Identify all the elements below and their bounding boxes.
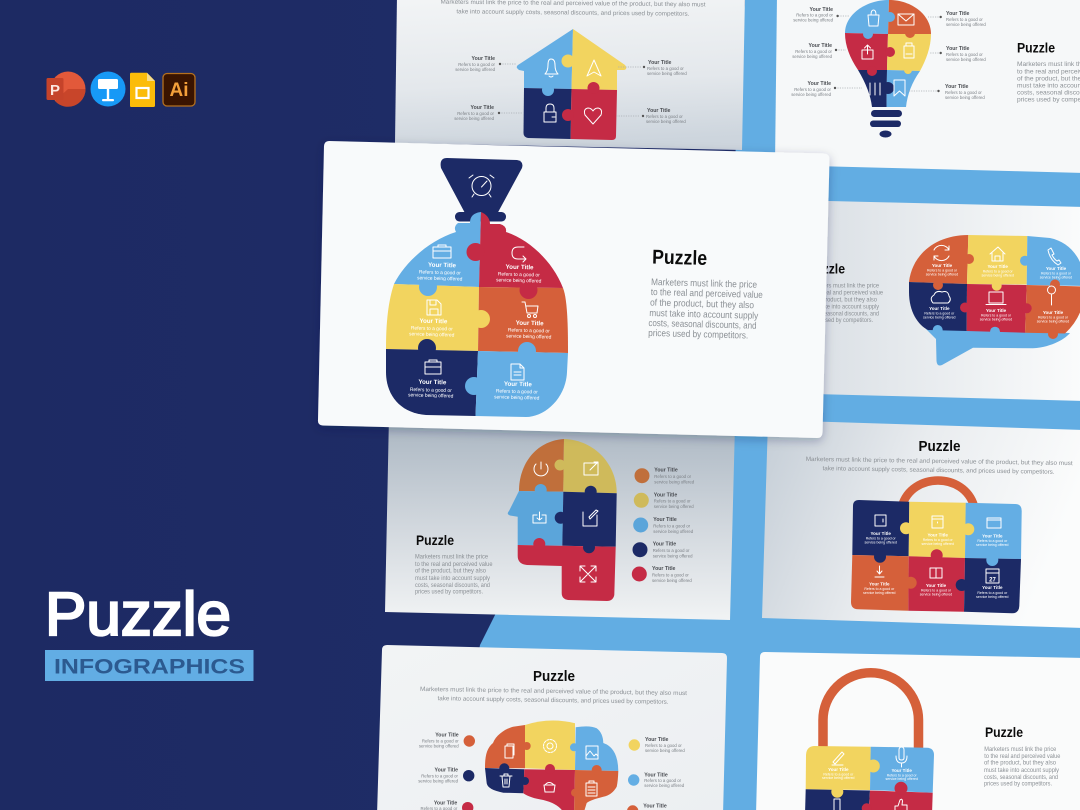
piece captions: Refers to a good or xyxy=(923,538,954,542)
bulb labels: service being offered xyxy=(946,57,986,62)
piece captions: service being offered xyxy=(926,272,958,276)
description text xyxy=(648,277,763,342)
piece captions: Refers to a good or xyxy=(921,589,952,593)
piece captions: service being offered xyxy=(885,777,918,781)
piece captions: Your Title xyxy=(505,264,534,271)
bulb labels: Your Title xyxy=(809,43,832,49)
speech bubble puzzle diagram xyxy=(909,235,1080,366)
brain labels: Your Title xyxy=(644,773,668,779)
piece captions: Your Title xyxy=(892,768,912,773)
legend: Refers to a good or xyxy=(654,474,692,479)
piece captions: service being offered xyxy=(494,394,540,402)
panel: main money bag slide xyxy=(318,141,830,438)
piece captions xyxy=(923,263,1072,324)
piece captions: Refers to a good or xyxy=(887,773,918,777)
description text: of the product, but they also xyxy=(415,568,486,574)
bulb labels: Your Title xyxy=(946,46,970,52)
legend: Refers to a good or xyxy=(652,572,689,577)
icon: trash xyxy=(500,774,512,787)
icon: share box xyxy=(584,462,598,475)
piece captions: Refers to a good or xyxy=(1038,316,1069,320)
legend: Refers to a good or xyxy=(653,548,690,553)
description text: must take into account supply xyxy=(415,575,491,582)
description text: Marketers must link the price xyxy=(984,746,1057,753)
briefcase puzzle diagram xyxy=(851,480,1022,613)
icon: gear xyxy=(544,740,556,752)
heading: Puzzle xyxy=(416,532,454,548)
panel: briefcase slide xyxy=(762,420,1080,628)
panel: speech bubble slide xyxy=(700,198,1080,401)
icon: document xyxy=(511,364,524,380)
piece captions: Your Title xyxy=(869,581,890,586)
piece captions: service being offered xyxy=(976,543,1009,547)
icon: laptop xyxy=(986,292,1006,304)
icon: image xyxy=(586,746,598,759)
icon: expand arrows xyxy=(580,566,596,582)
piece captions: service being offered xyxy=(496,277,542,285)
icon: open book xyxy=(930,568,942,578)
icon: thumbs up xyxy=(895,799,907,810)
house labels: Refers to a good or xyxy=(457,111,495,116)
legend: Refers to a good or xyxy=(653,523,691,528)
piece captions: Your Title xyxy=(428,262,457,269)
piece captions: Refers to a good or xyxy=(983,270,1014,274)
brain labels: Your Title xyxy=(645,737,669,743)
icon: phone xyxy=(1048,248,1061,265)
bulb puzzle diagram xyxy=(845,0,931,138)
description text: Marketers must link the price to the real and perceived value of the product, but they also must xyxy=(420,686,687,697)
legend: Your Title xyxy=(653,542,676,548)
icon: heart xyxy=(584,108,602,124)
description text: must take into account supply xyxy=(649,308,759,322)
piece captions: Refers to a good or xyxy=(977,591,1008,595)
icon: padlock xyxy=(544,104,556,122)
icon: envelope xyxy=(898,14,914,25)
head puzzle diagram xyxy=(508,439,617,601)
icon: edit xyxy=(583,510,598,526)
icon: documents xyxy=(505,744,514,758)
bag funnel neck xyxy=(441,158,522,216)
icon: Keynote xyxy=(90,72,126,106)
description text: Marketers must link the price xyxy=(415,554,488,560)
icon: PowerPoint xyxy=(46,72,86,107)
description text xyxy=(415,554,493,596)
bulb labels: Refers to a good or xyxy=(945,90,982,95)
icon: sliders xyxy=(870,83,880,95)
house labels xyxy=(454,56,687,124)
piece captions: service being offered xyxy=(409,331,455,339)
piece captions: Refers to a good or xyxy=(498,271,540,279)
piece captions xyxy=(822,767,918,781)
legend: service being offered xyxy=(652,578,692,583)
piece captions: Your Title xyxy=(1046,266,1067,271)
padlock puzzle diagram xyxy=(805,673,1061,810)
piece captions xyxy=(863,531,1009,599)
house labels: service being offered xyxy=(647,71,687,76)
house labels: Your Title xyxy=(471,105,494,111)
brain labels: service being offered xyxy=(644,783,685,788)
house labels: service being offered xyxy=(454,116,495,121)
heading: Puzzle xyxy=(985,724,1023,740)
description text: costs, seasonal discounts, and xyxy=(984,774,1058,781)
brain labels: Your Title xyxy=(435,733,459,739)
piece captions: service being offered xyxy=(923,316,956,320)
house labels: Your Title xyxy=(648,60,672,66)
brain labels: Your Title xyxy=(434,800,457,806)
brain labels: service being offered xyxy=(418,779,459,784)
legend: Your Title xyxy=(652,566,676,572)
piece captions: Your Title xyxy=(926,583,947,588)
heading: Puzzle xyxy=(918,439,960,455)
legend: Your Title xyxy=(653,517,677,523)
heading: Puzzle xyxy=(652,247,707,270)
brain labels: service being offered xyxy=(419,744,459,749)
icon: calendar xyxy=(986,569,999,583)
description text: Marketers must link the price to the real and perceived value of the product, but they also must xyxy=(806,456,1073,467)
description text xyxy=(1017,61,1080,104)
icon: bag xyxy=(868,10,879,26)
description text: prices used by competitors. xyxy=(415,588,483,596)
house labels: Refers to a good or xyxy=(458,62,496,67)
bulb labels: Refers to a good or xyxy=(794,87,832,92)
piece captions: service being offered xyxy=(981,274,1014,278)
icon: cloud xyxy=(931,291,950,303)
heading: Puzzle xyxy=(1017,40,1055,56)
bag pieces xyxy=(386,212,568,417)
piece captions: service being offered xyxy=(822,776,855,780)
icon: shopping cart xyxy=(522,302,538,318)
panel: house slide xyxy=(395,0,745,150)
brain labels: Your Title xyxy=(435,768,458,774)
piece captions: Refers to a good or xyxy=(977,539,1008,543)
brain puzzle diagram xyxy=(485,721,618,810)
icon: toolbox xyxy=(425,360,441,374)
piece captions: Refers to a good or xyxy=(927,268,958,272)
description text: take into account supply costs, seasonal discounts, and prices used by competitors. xyxy=(456,8,690,18)
brain labels: service being offered xyxy=(645,748,685,753)
software icons row xyxy=(46,72,195,107)
icon: box xyxy=(932,516,943,528)
piece captions: service being offered xyxy=(408,392,454,400)
bulb labels: Your Title xyxy=(945,84,969,90)
description text: must take into account supply xyxy=(806,304,880,310)
icon: alarm clock xyxy=(469,175,494,197)
panel: light bulb slide xyxy=(775,0,1080,173)
piece captions: Your Title xyxy=(932,263,953,268)
piece captions: Your Title xyxy=(986,308,1007,313)
description text xyxy=(440,0,706,18)
piece captions: Refers to a good or xyxy=(411,325,453,333)
brain labels: Refers to a good or xyxy=(422,738,459,743)
heading: Puzzle xyxy=(533,669,575,685)
bulb labels: Refers to a good or xyxy=(946,52,983,57)
bulb labels: Refers to a good or xyxy=(796,12,834,18)
bulb labels: Refers to a good or xyxy=(946,17,983,22)
title: Puzzle: Puzzle xyxy=(45,580,231,648)
icon: key xyxy=(1048,286,1056,305)
piece captions: Refers to a good or xyxy=(924,312,955,316)
bag puzzle diagram xyxy=(386,158,568,417)
description text: to the real and perceived value xyxy=(806,290,883,296)
house puzzle diagram xyxy=(517,29,626,140)
description text: Marketers must link the price xyxy=(651,277,757,291)
brain labels: Refers to a good or xyxy=(421,773,459,778)
icon: briefcase xyxy=(433,245,451,258)
icon: printer xyxy=(904,43,914,58)
piece captions: service being offered xyxy=(976,595,1009,599)
description text xyxy=(806,282,883,324)
legend: Refers to a good or xyxy=(654,499,691,504)
calendar date: 27 xyxy=(989,578,996,584)
icon: microphone xyxy=(896,747,907,767)
description text: to the real and perceived value xyxy=(651,287,763,301)
house labels: service being offered xyxy=(646,119,686,124)
house labels: Your Title xyxy=(472,56,495,62)
description text: of the product, but they also xyxy=(650,297,754,311)
description text: take into account supply costs, seasonal discounts, and prices used by competitors. xyxy=(823,465,1055,476)
brain labels xyxy=(418,733,685,810)
bulb labels: service being offered xyxy=(793,18,834,22)
piece captions: Refers to a good or xyxy=(823,772,854,776)
bulb labels: service being offered xyxy=(946,22,986,27)
description text: costs, seasonal discounts, and xyxy=(648,318,757,332)
piece captions xyxy=(408,261,552,402)
brain labels: Your Title xyxy=(643,804,667,810)
bulb labels: Your Title xyxy=(810,7,833,13)
bulb labels: Your Title xyxy=(946,11,970,17)
subtitle badge: Infographics: INFOGRAPHICS xyxy=(54,654,245,678)
legend: Your Title xyxy=(654,468,678,474)
piece captions: service being offered xyxy=(980,318,1012,322)
piece captions: Your Title xyxy=(419,318,448,325)
heading: Puzzle xyxy=(807,262,845,276)
piece captions: service being offered xyxy=(921,542,954,546)
house labels: Refers to a good or xyxy=(646,114,683,119)
description text xyxy=(984,746,1061,788)
piece captions: Your Title xyxy=(828,767,849,772)
icon: bell xyxy=(545,59,558,77)
piece captions: Your Title xyxy=(418,379,447,386)
panel: head slide xyxy=(385,415,735,620)
piece captions: service being offered xyxy=(863,591,896,595)
piece captions: service being offered xyxy=(506,333,552,341)
icon: Google Slides xyxy=(130,73,155,107)
background blue diagonal area xyxy=(450,0,1080,810)
legend: service being offered xyxy=(654,480,695,484)
piece captions: Your Title xyxy=(504,381,532,388)
icon: Illustrator xyxy=(163,74,195,106)
icon: download tray xyxy=(875,566,884,577)
piece captions: Your Title xyxy=(516,320,544,327)
piece captions: service being offered xyxy=(920,593,952,597)
description text: Marketers must link the price xyxy=(806,282,879,290)
piece captions: service being offered xyxy=(1040,276,1072,280)
legend: Your Title xyxy=(654,492,677,498)
brain labels: Refers to a good or xyxy=(645,743,682,748)
piece captions: Your Title xyxy=(928,533,948,538)
piece captions: Refers to a good or xyxy=(981,314,1012,318)
bulb labels: Your Title xyxy=(808,81,831,87)
icon: sync xyxy=(934,245,949,261)
piece captions: Refers to a good or xyxy=(419,269,461,277)
piece captions: Refers to a good or xyxy=(496,388,538,396)
description text: of the product, but they also xyxy=(806,296,877,304)
panel: padlock slide xyxy=(756,652,1080,810)
bulb labels: service being offered xyxy=(791,92,832,97)
icon: power xyxy=(534,462,548,476)
description text: to the real and perceived value xyxy=(984,753,1061,760)
description text: take into account supply costs, seasonal discounts, and prices used by competitors. xyxy=(438,695,669,706)
brain labels: Refers to a good or xyxy=(644,778,682,783)
piece captions: Refers to a good or xyxy=(508,327,550,335)
legend xyxy=(632,468,695,583)
description text: costs, seasonal discounts, and xyxy=(415,582,490,589)
icon: folder xyxy=(987,518,1001,528)
description text: to the real and perceived value xyxy=(415,561,493,568)
description text: prices used by competitors. xyxy=(648,328,748,342)
description text: costs, seasonal discounts, and xyxy=(806,310,879,318)
icon: clipboard xyxy=(586,781,597,796)
icon: bookmark xyxy=(894,80,905,96)
piece captions: Your Title xyxy=(982,534,1003,539)
bag tie xyxy=(455,212,506,222)
house labels: Your Title xyxy=(647,108,671,114)
icon: share xyxy=(862,45,873,59)
icon: download xyxy=(533,512,546,523)
icon: Illustrator: Ai xyxy=(170,80,188,101)
description text: of the product, but they also xyxy=(984,760,1056,767)
icon: basket xyxy=(544,782,555,792)
piece captions: service being offered xyxy=(1037,320,1069,324)
panel: brain slide xyxy=(377,645,727,810)
piece captions: Your Title xyxy=(929,306,950,311)
piece captions: service being offered xyxy=(864,541,897,545)
description text xyxy=(806,456,1073,476)
piece captions: service being offered xyxy=(417,275,463,283)
icon: floppy disk xyxy=(427,300,441,315)
description text: prices used by competitors. xyxy=(984,781,1052,788)
description text: must take into account supply xyxy=(984,767,1060,774)
icon: navigation arrow xyxy=(587,60,601,76)
icon: rotate arrow xyxy=(512,247,526,262)
piece captions: Refers to a good or xyxy=(866,537,897,541)
piece captions: Refers to a good or xyxy=(1041,272,1072,276)
piece captions: Your Title xyxy=(871,531,891,536)
piece captions: Refers to a good or xyxy=(864,587,895,591)
description text xyxy=(420,686,687,706)
bulb labels xyxy=(791,7,986,100)
icon: wallet xyxy=(875,515,886,526)
piece captions: Refers to a good or xyxy=(410,387,452,394)
bulb labels: Refers to a good or xyxy=(795,49,833,54)
subtitle badge: Infographics xyxy=(45,650,254,681)
house labels: Refers to a good or xyxy=(647,66,684,71)
legend: service being offered xyxy=(653,529,694,534)
icon: PowerPoint: P xyxy=(50,82,60,99)
bulb labels: service being offered xyxy=(792,54,833,59)
icon: home xyxy=(990,247,1005,261)
bulb labels: service being offered xyxy=(945,95,985,100)
legend: service being offered xyxy=(653,554,693,558)
description text: prices used by competitors. xyxy=(806,317,873,324)
piece captions: Your Title xyxy=(982,585,1003,590)
icon: phone xyxy=(834,799,840,810)
legend: service being offered xyxy=(654,504,694,509)
piece captions: Your Title xyxy=(1043,310,1064,315)
house labels: service being offered xyxy=(455,67,496,72)
icon: pencil xyxy=(832,752,844,765)
piece captions: Your Title xyxy=(988,264,1008,269)
